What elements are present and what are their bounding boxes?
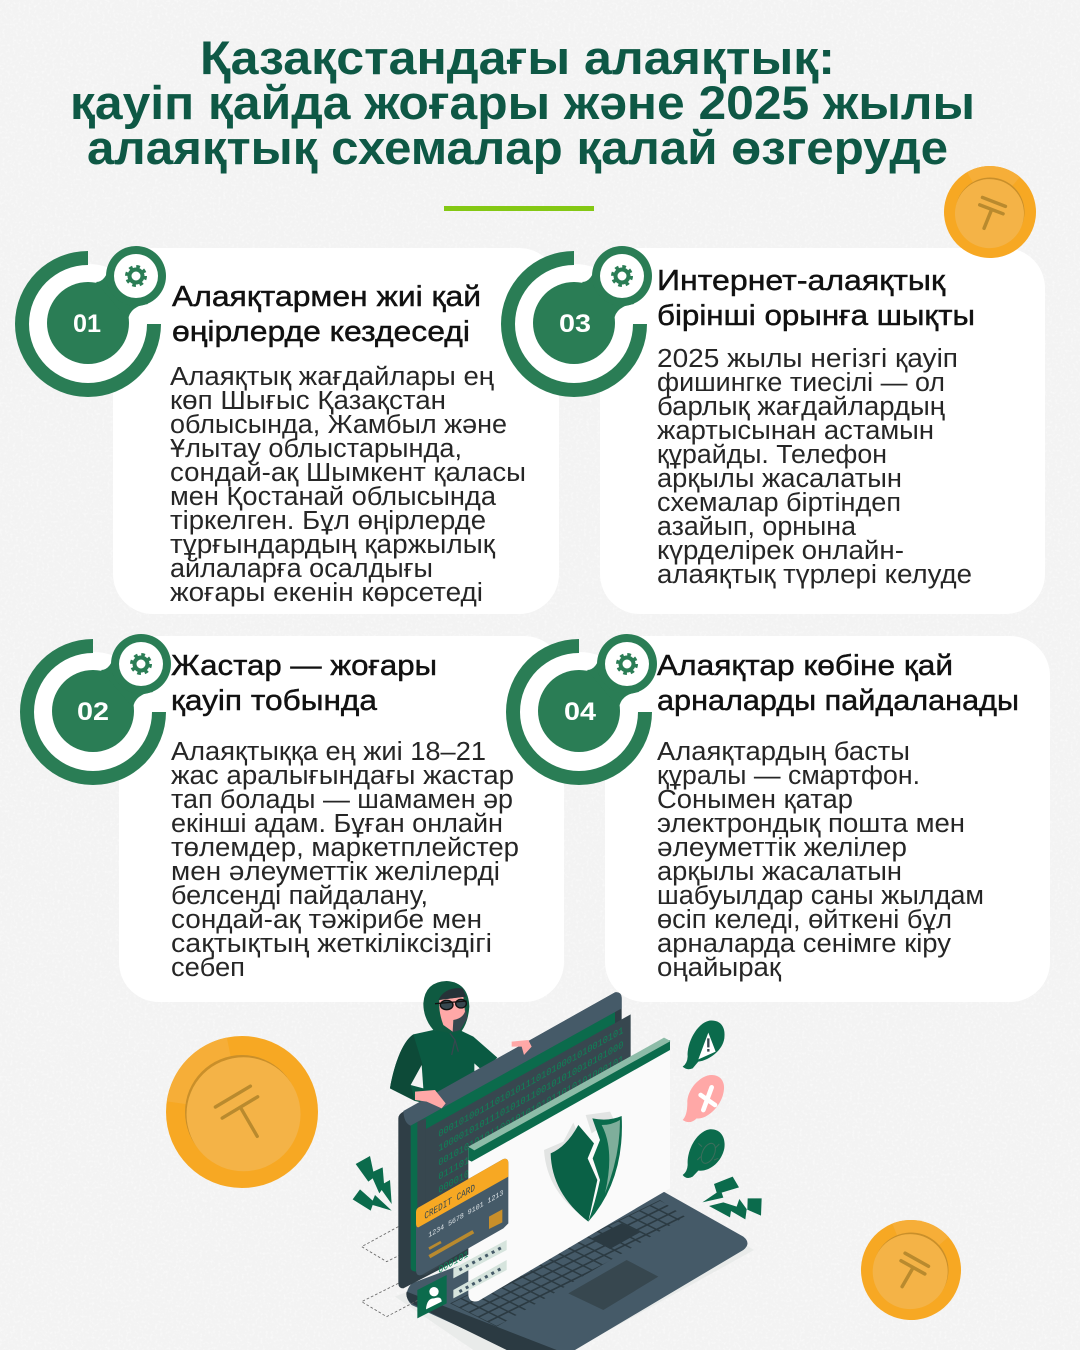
body text 02: жас аралығындағы жастар <box>171 762 514 790</box>
credit card: 1234 5678 9101 1213 <box>428 1189 504 1240</box>
body text 02: екінші адам. Бұған онлайн <box>171 810 503 838</box>
body text 03 <box>657 345 972 589</box>
body text 01: мен Қостанай облысында <box>170 483 497 511</box>
body text 02: тап болады — шамамен әр <box>171 786 513 814</box>
binary code: 001010101011001010101011010101000101 <box>438 1054 623 1170</box>
binary code: 000010101001010101010101001010101010 <box>438 1081 623 1197</box>
binary code: 011101010010101011010101010101000110 <box>438 1068 623 1184</box>
badge 02: 02 <box>77 698 109 726</box>
body text 04: өсіп келеді, өйткені бұл <box>657 906 952 934</box>
body text 01: Алаяқтық жағдайлары ең <box>170 363 494 391</box>
panel 04: channels <box>605 636 1050 1002</box>
title: алаяқтық схемалар қалай өзгеруде <box>87 121 948 174</box>
badge 02 <box>20 634 171 785</box>
body text 03: алаяқтық түрлері келуде <box>657 561 972 589</box>
heading 01: Алаяқтармен жиі қай <box>172 281 481 313</box>
hacker <box>390 981 497 1108</box>
body text 02 <box>171 738 519 982</box>
heading 01: өңірлерде кездеседі <box>172 316 470 348</box>
broken shield <box>544 1112 622 1222</box>
heading 03: бірінші орынға шықты <box>657 300 975 332</box>
body text 04: шабуылдар саны жылдам <box>657 882 984 910</box>
heading 04: арналарды пайдаланады <box>657 685 1019 717</box>
speech bubble: error <box>683 1075 724 1122</box>
body text 01: айлаларға осалдығы <box>170 555 433 583</box>
body text 01: тұрғындардың қаржылық <box>170 531 496 559</box>
badge 01: 01 <box>73 310 101 338</box>
panel 03: internet fraud <box>600 248 1045 614</box>
badge 04 <box>506 634 657 785</box>
title: Қазақстандағы алаяқтық: <box>200 31 835 84</box>
body text 01: көп Шығыс Қазақстан <box>170 387 446 415</box>
body text 02: сақтықтың жеткіліксіздігі <box>171 930 492 958</box>
heading 04: Алаяқтар көбіне қай <box>657 650 953 682</box>
trackpad <box>568 1260 658 1310</box>
badge 03 <box>501 246 652 397</box>
body text 03: 2025 жылы негізгі қауіп <box>657 345 958 373</box>
lightning left <box>353 1156 392 1211</box>
rear monitor <box>398 992 631 1288</box>
dashed guide lines <box>362 1227 420 1317</box>
title: қауіп қайда жоғары және 2025 жылы <box>70 76 975 129</box>
body text 03: жартысынан астамын <box>657 417 934 445</box>
heading 04 <box>657 650 1019 717</box>
body text 01: Ұлытау облыстарында, <box>170 435 462 463</box>
card background 04 <box>605 636 1050 1002</box>
credit card <box>416 1159 508 1275</box>
keyboard <box>450 1200 685 1327</box>
card background 03 <box>600 248 1045 614</box>
binary code: 000101001110101011101010001010010101 <box>438 1025 623 1141</box>
body text 01: облысында, Жамбыл және <box>170 411 507 439</box>
body text 03: күрделірек онлайн- <box>657 537 904 565</box>
coin bottom right <box>843 1202 979 1338</box>
speech bubble: warning <box>683 1021 725 1069</box>
heading 03 <box>657 265 975 332</box>
card background 02 <box>119 636 564 1002</box>
body text 02: себеп <box>171 954 245 982</box>
password fields <box>453 1240 507 1298</box>
body text 04: оңайырақ <box>657 954 782 982</box>
user card <box>417 1275 447 1318</box>
coin bottom left <box>166 1036 318 1188</box>
body text 04: арқылы жасалатын <box>657 858 902 886</box>
binary code <box>438 1025 623 1277</box>
heading 01 <box>172 281 481 348</box>
illustration: hacker with laptop <box>353 981 762 1350</box>
body text 01 <box>170 363 526 607</box>
browser window <box>468 1038 671 1301</box>
accent line under title <box>444 206 594 211</box>
body text 04: арналарда сенімге кіру <box>657 930 951 958</box>
speech bubble: bug <box>683 1129 725 1178</box>
body text 02: төлемдер, маркетплейстер <box>171 834 519 862</box>
body text 03: азайып, орнына <box>657 513 857 541</box>
panel 01: regions <box>113 248 559 614</box>
body text 03: құрайды. Телефон <box>657 441 887 469</box>
heading 02: Жастар — жоғары <box>171 650 437 682</box>
binary code: 100001010111010101100101010010101000 <box>438 1040 623 1155</box>
body text 02: сондай-ақ тәжірибе мен <box>171 906 482 934</box>
heading 02 <box>171 650 437 717</box>
body text 04: құралы — смартфон. <box>657 762 920 790</box>
body text 03: барлық жағдайлардың <box>657 393 945 421</box>
badge 03: 03 <box>559 310 591 338</box>
body text 03: фишингке тиесілі — ол <box>657 369 945 397</box>
credit card: CREDIT CARD <box>424 1183 475 1223</box>
title <box>70 31 975 174</box>
body text 04: Сонымен қатар <box>657 786 853 814</box>
body text 03: арқылы жасалатын <box>657 465 902 493</box>
body text 04: Алаяқтардың басты <box>657 738 910 766</box>
body text 04: электрондық пошта мен <box>657 810 965 838</box>
heading 03: Интернет-алаяқтық <box>657 265 945 297</box>
panel 02: youth <box>119 636 564 1002</box>
badge 01 <box>15 246 166 397</box>
coin top right <box>925 147 1055 277</box>
heading 02: қауіп тобында <box>171 685 378 717</box>
body text 01: жоғары екенін көрсетеді <box>170 579 483 607</box>
body text 04 <box>657 738 984 982</box>
body text 01: сондай-ақ Шымкент қаласы <box>170 459 526 487</box>
badge 04: 04 <box>564 698 596 726</box>
binary code: 000101 <box>438 1249 468 1277</box>
body text 03: схемалар біртіндеп <box>657 489 901 517</box>
body text 02: мен әлеуметтік желілерді <box>171 858 500 886</box>
body text 02: белсенді пайдалану, <box>171 882 428 910</box>
body text 01: тіркелген. Бұл өңірлерде <box>170 507 486 535</box>
laptop base <box>395 1191 754 1350</box>
lightning right <box>702 1177 762 1219</box>
body text 02: Алаяқтыққа ең жиі 18–21 <box>171 738 486 766</box>
card background 01 <box>113 248 559 614</box>
hacker hands <box>415 1040 532 1108</box>
body text 04: әлеуметтік желілер <box>657 834 907 862</box>
